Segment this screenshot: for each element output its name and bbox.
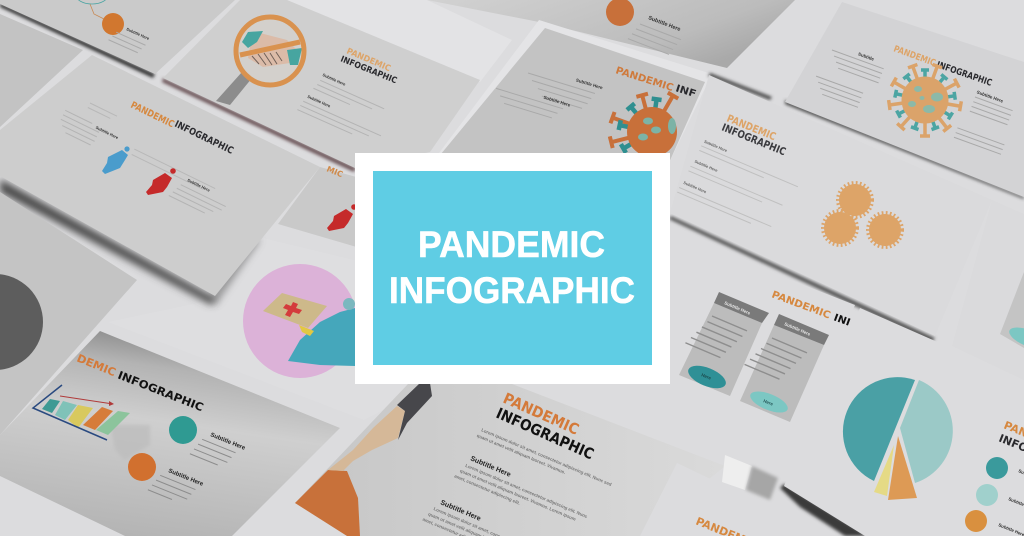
title: handshake slide: INFOGRAPHIC <box>339 55 398 86</box>
icon: small orange node <box>102 13 124 35</box>
text block: intro: quam ut amet velit aliquam laoreet. Vivamus. <box>476 433 566 475</box>
text lines: left side <box>811 40 886 111</box>
slide: large left with dark circle <box>0 192 137 435</box>
text block: subtitle one: quam ut amet velit aliquam laoreet. Vivamus. Lorem ipsum <box>459 468 577 522</box>
text block: left subtitle: Subtitle Here <box>95 125 120 140</box>
grey card fragment <box>1000 272 1024 348</box>
card: right: Subtitle Here <box>784 321 812 337</box>
card: right <box>740 314 829 422</box>
icon: light teal badge <box>976 484 998 506</box>
icon: red figure <box>146 168 176 195</box>
slide: bottom centre <box>640 463 830 536</box>
title: cards slide: PANDEMIC <box>770 290 832 322</box>
light band behind top slides <box>287 0 512 82</box>
title: people slide: INFOGRAPHIC <box>173 119 235 157</box>
slide: handshake <box>162 0 480 172</box>
icon: blue figure <box>102 146 130 174</box>
title: top right slide: INFOGRAPHIC <box>935 60 993 89</box>
card: right: Here <box>763 398 774 407</box>
text lines: left of virus: Subtitle Here <box>543 95 571 108</box>
teal pill <box>1006 323 1024 353</box>
title panel <box>355 153 670 384</box>
title: cards slide: INI <box>832 313 852 329</box>
text lines with subtitles: Subtitle Here <box>683 180 708 195</box>
dark circle chart <box>0 274 43 370</box>
title: bar chart slide: DEMIC <box>75 352 118 379</box>
text block: subtitle one: Lorem ipsum dolor sit amet, consectetur adipiscing elit. Nunc <box>465 463 589 519</box>
slide: face and text <box>295 383 725 536</box>
card: left: Subtitle Here <box>724 300 752 316</box>
text block: second subtitle: Subtitle Here <box>167 468 204 488</box>
subtitles <box>998 468 1024 536</box>
text lines <box>628 22 681 57</box>
subtitle and text lines <box>109 21 151 55</box>
text lines with subtitles <box>677 137 801 235</box>
icon: pink circle with doctor and medical box <box>243 264 357 378</box>
title: face slide <box>493 389 597 463</box>
title: top right slide <box>892 44 993 89</box>
pie chart <box>843 377 953 500</box>
text block: first subtitle <box>190 428 246 472</box>
slide: pie chart <box>780 308 1024 536</box>
slide: top centre with orange badge <box>427 0 795 68</box>
text lines: left side: Subtitle <box>857 51 875 62</box>
title: three viruses slide <box>720 113 788 158</box>
world map shadow <box>110 425 150 460</box>
text lines with subtitles: Subtitle Here <box>322 72 347 87</box>
slide: far right edge <box>952 200 1024 380</box>
text lines: left of virus <box>493 56 604 130</box>
text lines with subtitles: Subtitle Here <box>703 139 729 153</box>
title: face slide: INFOGRAPHIC <box>493 404 597 463</box>
icon: person with hair, skin and orange top <box>295 383 432 536</box>
subtitle and text lines: Subtitle Here <box>126 26 151 41</box>
connector to node <box>90 4 104 19</box>
intro text lines <box>78 103 225 194</box>
text block: intro: Lorem ipsum dolor sit amet, consectetur adipiscing elit. Nunc sed <box>481 427 613 487</box>
title: people slide <box>129 100 235 157</box>
title: people slide: PANDEMIC <box>129 100 176 130</box>
slide: people <box>0 55 320 305</box>
pedestal shapes below cards <box>722 455 778 500</box>
icon: orange badge <box>606 0 634 26</box>
text block: subtitle two <box>422 495 519 536</box>
slide: top right virus <box>785 2 1024 199</box>
title: bar chart slide <box>75 352 205 414</box>
slide: cards <box>625 233 855 450</box>
icon: orange badge <box>128 453 156 481</box>
icon: large orange virus with teal spikes <box>889 64 961 136</box>
text block: left subtitle <box>56 109 120 155</box>
title: bar chart slide: INFOGRAPHIC <box>116 369 205 414</box>
text block: first subtitle: Subtitle Here <box>209 432 246 452</box>
title: handshake slide: PANDEMIC <box>345 47 392 74</box>
text block: subtitle two: Subtitle Here <box>439 499 482 523</box>
icon: red figure <box>327 204 357 231</box>
slide: three viruses <box>669 73 992 342</box>
slide: left edge grey <box>0 14 83 127</box>
title: cards slide <box>770 290 852 329</box>
teal node ring <box>76 0 108 4</box>
card: left: Here <box>701 372 712 381</box>
text block: right subtitle <box>169 173 230 220</box>
slide: centre top with orange virus <box>430 20 712 165</box>
bar chart <box>33 385 130 440</box>
text block: subtitle one: amet, consectetur adipiscing elit. <box>454 473 521 506</box>
title: centre slide <box>614 65 697 100</box>
title: top right slide: PANDEMIC <box>892 44 937 69</box>
slide: white with pink circle <box>108 232 432 420</box>
text block: subtitle one <box>454 452 592 532</box>
subtitle text: Subtitle Here <box>647 15 681 33</box>
text lines with subtitles: Subtitle Here <box>694 159 719 173</box>
text lines: left of virus: Subtitle Here <box>575 77 604 91</box>
title: three viruses slide: INFOGRAPHIC <box>720 122 788 158</box>
text lines with subtitles <box>297 68 395 145</box>
slide: small red figure behind panel <box>278 165 360 248</box>
text block: right subtitle: Subtitle Here <box>187 177 212 193</box>
icon: teal gear badge <box>169 416 197 444</box>
title: centre slide: INF <box>674 83 697 100</box>
icon: orange badge <box>965 510 987 532</box>
icon: teal badge <box>986 457 1008 479</box>
heading line one: PANDEMIC <box>418 224 605 265</box>
title fragment: MIC <box>325 165 344 179</box>
text lines: right side: Subtitle Here <box>976 89 1004 104</box>
text lines: right side <box>954 87 1019 154</box>
text lines with subtitles: Subtitle Here <box>307 94 332 109</box>
icon: three tan viruses <box>824 184 901 246</box>
title: three viruses slide: PANDEMIC <box>725 113 778 143</box>
card: left <box>679 292 769 396</box>
slide: bar chart <box>0 331 340 536</box>
icon: dark orange virus <box>610 93 678 157</box>
heading line two: INFOGRAPHIC <box>389 270 635 311</box>
text block: subtitle one: Subtitle Here <box>469 455 512 479</box>
icon: no handshake sign <box>216 17 304 105</box>
slide: top left with orange node <box>0 0 235 78</box>
title: face slide: PANDEMIC <box>500 389 582 439</box>
text block: second subtitle <box>148 464 204 508</box>
title: centre slide: PANDEMIC <box>614 65 675 94</box>
